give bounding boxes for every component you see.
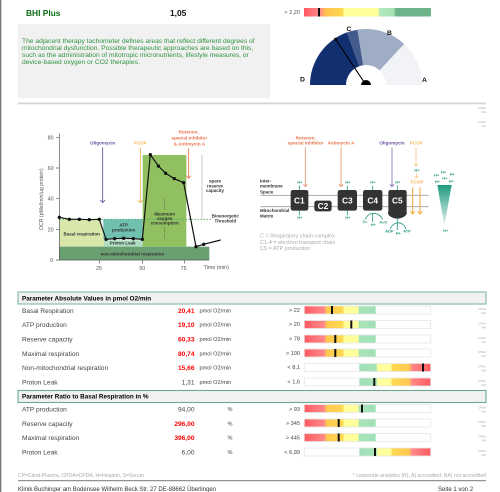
oligomycin arrow	[90, 141, 115, 203]
row: non-mitochondrial respiration: NAi	[481, 368, 486, 372]
row: proton leak: < 1,6	[287, 380, 300, 386]
area labels: Maximum	[154, 211, 175, 216]
panel: explanation text: The adjacent therapy tachometer defines areas that reflect different degrees of	[22, 38, 255, 45]
row: proton leak: 1,31	[182, 380, 195, 386]
proton labels: H+	[442, 176, 448, 181]
FCCP arrow: FCCP	[134, 141, 147, 146]
gauge segment B	[358, 29, 404, 70]
row: ATP production ratio: CPDA	[478, 406, 486, 410]
compartment labels: Inter-	[260, 178, 272, 183]
row: non-mitochondrial respiration: pmol O2/min	[200, 366, 231, 372]
row: reserve capacity: CPDA	[478, 336, 486, 340]
row: ATP production ratio: 94,00	[178, 406, 195, 414]
row: maximal respiration ratio: > 445	[286, 436, 300, 442]
row: maximal respiration: 80,74	[178, 351, 195, 358]
row: ATP production: pmol O2/min	[200, 322, 231, 328]
row: proton leak ratio: 6,00	[182, 450, 195, 456]
gauge labels	[300, 26, 427, 84]
proton labels: H+	[435, 179, 441, 184]
row: basal respiration: > 22	[289, 308, 300, 314]
proton labels: H₂O	[379, 219, 387, 224]
inhibitor labels: special inhibitor	[288, 141, 324, 146]
axis labels: Time (min)	[204, 265, 229, 271]
row: ATP production: NAi	[481, 326, 486, 330]
row: maximal respiration	[22, 349, 486, 358]
row: proton leak: Proton Leak	[22, 380, 58, 386]
proton labels: ATP	[403, 228, 411, 233]
row: non-mitochondrial respiration: < 8,1	[287, 365, 300, 371]
row: maximal respiration ratio: CPDA	[478, 434, 486, 438]
row: proton leak ratio: Proton Leak	[22, 450, 58, 456]
row: reserve capacity ratio: NAi	[481, 424, 486, 428]
row: non-mitochondrial respiration: Non-mitochondrial respiration	[22, 365, 108, 372]
row: basal respiration: Basal Respiration	[22, 308, 74, 315]
axis labels: 50	[139, 266, 145, 272]
non-mitochondrial area	[59, 247, 209, 260]
row: maximal respiration: > 100	[286, 351, 300, 357]
row: non-mitochondrial respiration: 15,66	[178, 365, 195, 372]
proton labels: ADP	[385, 228, 394, 233]
proton labels: H+	[395, 179, 401, 184]
row: reserve capacity: > 78	[289, 336, 300, 342]
compartment labels: Mitochondrial	[260, 208, 289, 213]
accreditation note	[478, 120, 486, 128]
proton labels: H+	[345, 215, 351, 220]
axis labels: 60	[48, 166, 54, 172]
complexes: C5	[392, 195, 403, 205]
row: reserve capacity ratio: 296,00	[174, 421, 195, 428]
row: basal respiration: pmol O2/min	[200, 308, 231, 314]
compartment labels	[260, 178, 289, 219]
row: reserve capacity ratio: CPDA	[478, 420, 486, 424]
proton gradient triangle	[437, 185, 452, 226]
page edge strip	[0, 0, 1, 492]
axis labels	[39, 135, 229, 272]
row: reserve capacity ratio: Reserve capacity	[22, 421, 73, 428]
tachometer gauge	[300, 26, 427, 85]
row: proton leak ratio: %	[228, 450, 232, 456]
proton labels: H+	[297, 215, 303, 220]
sample type footnote: CP=Citrat-Plasma, CPDA=CPDA, H=Heparin, S=Serum	[18, 473, 144, 479]
proton labels: H+	[297, 179, 303, 184]
score heading: BHI Plus	[26, 8, 61, 18]
row: ATP production ratio: %	[228, 407, 232, 413]
proton labels: H+	[345, 179, 351, 184]
row: reserve capacity: pmol O2/min	[200, 337, 231, 343]
divider with accreditation note: NAi	[481, 110, 486, 114]
score heading	[26, 8, 187, 18]
row: maximal respiration: NAi	[481, 354, 486, 358]
proton labels: H+	[434, 172, 440, 177]
row: basal respiration: CPDA	[478, 307, 486, 311]
row: reserve capacity	[22, 335, 486, 344]
area labels: Proton Leak	[110, 241, 136, 246]
section header: Parameter Absolute Values in pmol O2/min	[22, 296, 151, 302]
proton labels: H+	[370, 179, 376, 184]
area labels: consumption	[151, 221, 179, 226]
compartment labels: membrane	[260, 184, 283, 189]
proton leak area	[104, 240, 143, 247]
diagram legend	[260, 234, 335, 252]
row: ATP production ratio: ATP production	[22, 406, 67, 414]
inhibitor labels: FCCP	[410, 141, 423, 146]
row: maximal respiration ratio	[22, 434, 486, 442]
diagram legend: C5 = ATP production	[260, 246, 310, 252]
score range bar	[284, 8, 431, 16]
row: reserve capacity ratio: > 345	[286, 421, 300, 427]
inhibitor labels: Oligomycin	[379, 141, 405, 146]
row: reserve capacity ratio	[22, 419, 486, 428]
inhibitor labels	[288, 135, 423, 185]
row: basal respiration	[22, 306, 486, 315]
row: ATP production: 19,10	[178, 322, 195, 329]
complexes	[291, 190, 407, 219]
row: maximal respiration: CPDA	[478, 350, 486, 354]
footer rule	[18, 480, 486, 481]
axis labels: 25	[96, 266, 102, 272]
row: maximal respiration: Maximal respiration	[22, 351, 79, 358]
area labels: Bioenergetic	[212, 214, 239, 219]
accreditation note: NAi	[481, 124, 486, 128]
axis labels: 75	[181, 266, 187, 272]
row: ATP production ratio	[22, 404, 486, 414]
row: reserve capacity ratio: %	[228, 422, 232, 428]
row: maximal respiration ratio: Maximal respiration	[22, 435, 79, 442]
row: proton leak	[22, 378, 486, 387]
compartment labels: Space	[260, 189, 274, 194]
row: proton leak ratio: CPDA	[478, 449, 486, 453]
row: ATP production: CPDA	[478, 322, 486, 326]
complexes: C3	[342, 196, 353, 206]
row: reserve capacity: Reserve capacity	[22, 336, 73, 344]
gauge labels: A	[422, 77, 427, 84]
complexes: C2	[318, 201, 329, 211]
basal respiration area	[59, 219, 104, 247]
row: proton leak ratio	[22, 448, 486, 457]
row: maximal respiration ratio: 396,00	[174, 435, 195, 442]
panel: explanation text: mitochondrial dysfunction. Possible therapeutic approaches are based on this,	[22, 45, 253, 52]
area labels: Basal respiration	[63, 231, 100, 236]
row: proton leak ratio: < 6,99	[284, 450, 300, 456]
row: proton leak ratio: NAi	[481, 453, 486, 457]
FCCP arrow	[134, 141, 147, 203]
inhibitor arrows	[303, 147, 422, 214]
panel: explanation text: such as the administration of mitotropic micronutrients, lifestyle measures, or	[22, 52, 249, 59]
gauge labels: C	[346, 26, 352, 33]
proton labels: H+	[414, 168, 420, 173]
axis labels: 40	[48, 197, 54, 203]
table: absolute values	[18, 292, 486, 387]
area labels: spare	[209, 179, 221, 184]
gauge segment D	[310, 32, 359, 85]
area labels: reserve	[207, 183, 223, 188]
accreditation footnote: * cooperate analytics (R), A) accredited, NA) not accredited	[353, 473, 486, 479]
area labels: production	[112, 227, 136, 232]
score range bar: > 2,20	[284, 10, 300, 16]
diagram legend: C = Respiratory chain complex	[260, 234, 335, 240]
rotenone arrow	[171, 130, 207, 178]
OCR line chart	[39, 130, 239, 272]
proton labels	[297, 168, 456, 235]
rotenone arrow: Rotenon,	[179, 130, 199, 135]
proton labels: H+	[449, 178, 455, 183]
proton labels: H+	[371, 222, 377, 227]
rotenone arrow: special inhibitor	[171, 135, 207, 140]
axis labels: 0	[50, 258, 53, 264]
row: maximal respiration ratio: %	[228, 436, 232, 442]
accreditation note: CPDA	[478, 120, 486, 124]
row: proton leak: CPDA	[478, 379, 486, 383]
proton labels: O₂	[363, 219, 368, 224]
membrane lines	[261, 195, 429, 207]
row: non-mitochondrial respiration: CPDA	[478, 364, 486, 368]
inhibitor labels: Antimycin A	[327, 141, 355, 146]
complexes: C1	[294, 195, 305, 205]
data line	[58, 153, 221, 248]
row: ATP production ratio: > 93	[289, 407, 300, 413]
complexes: C4	[367, 195, 378, 205]
divider with accreditation note	[18, 102, 486, 114]
gauge labels: B	[387, 30, 392, 37]
inhibitor labels: Rotenon,	[296, 135, 316, 140]
oligomycin arrow: Oligomycin	[90, 141, 115, 146]
section header	[18, 292, 486, 304]
proton flow arrows	[299, 185, 406, 230]
area labels: non-mitochondrial respiration	[100, 252, 164, 257]
proton labels: H+	[450, 171, 456, 176]
area labels: ATP	[119, 223, 128, 228]
area labels: capacity	[206, 188, 224, 193]
axes	[56, 133, 209, 263]
row: proton leak: pmol O2/min	[200, 380, 231, 386]
compartment labels: Matrix	[260, 214, 274, 219]
axis labels: OCR (pMol/min/µg protein)	[39, 168, 45, 230]
row: ATP production: > 20	[289, 322, 300, 328]
row: proton leak: NAi	[481, 383, 486, 387]
axis labels: 20	[48, 227, 54, 233]
divider with accreditation note: CPDA	[478, 106, 486, 110]
proton labels: H+	[441, 169, 447, 174]
ATP production area	[103, 219, 143, 239]
row: maximal respiration ratio: NAi	[481, 438, 486, 442]
proton labels: H+	[396, 230, 402, 235]
gauge needle	[334, 38, 371, 85]
section header	[18, 390, 486, 402]
row: ATP production ratio: NAi	[481, 410, 486, 414]
section header: Parameter Ratio to Basal Respiration in %	[22, 394, 149, 400]
gauge labels: D	[300, 76, 305, 84]
row: reserve capacity: NAi	[481, 340, 486, 344]
diagram legend: C1-4 = electron transport chain	[260, 240, 335, 246]
panel: explanation text: device-based oxygen or CO2 therapies.	[22, 59, 140, 66]
gauge segment A	[380, 44, 422, 85]
gauge segment C	[347, 30, 363, 66]
double arrows	[165, 155, 202, 239]
row: non-mitochondrial respiration	[22, 364, 486, 372]
row: ATP production	[22, 320, 486, 330]
score heading: 1,05	[170, 8, 187, 18]
area labels	[63, 179, 239, 257]
row: basal respiration: 20,41	[178, 308, 195, 315]
row: maximal respiration: pmol O2/min	[200, 352, 231, 358]
threshold line	[59, 218, 212, 221]
row: reserve capacity: 60,33	[178, 336, 195, 344]
rotenone arrow: & Antimycin A	[174, 141, 206, 146]
proton labels: H+	[443, 228, 449, 233]
row: basal respiration: NAi	[481, 311, 486, 315]
table: ratio to basal respiration	[18, 390, 486, 457]
electron transport chain diagram	[260, 135, 456, 252]
area labels: oxygen	[157, 216, 173, 221]
area labels: Threshold	[214, 218, 236, 223]
maximum oxygen consumption area	[143, 155, 186, 247]
axis labels: 80	[48, 135, 54, 141]
inhibitor labels: FCCP	[411, 180, 423, 185]
row: ATP production: ATP production	[22, 322, 67, 329]
panel: explanation text	[18, 24, 270, 98]
